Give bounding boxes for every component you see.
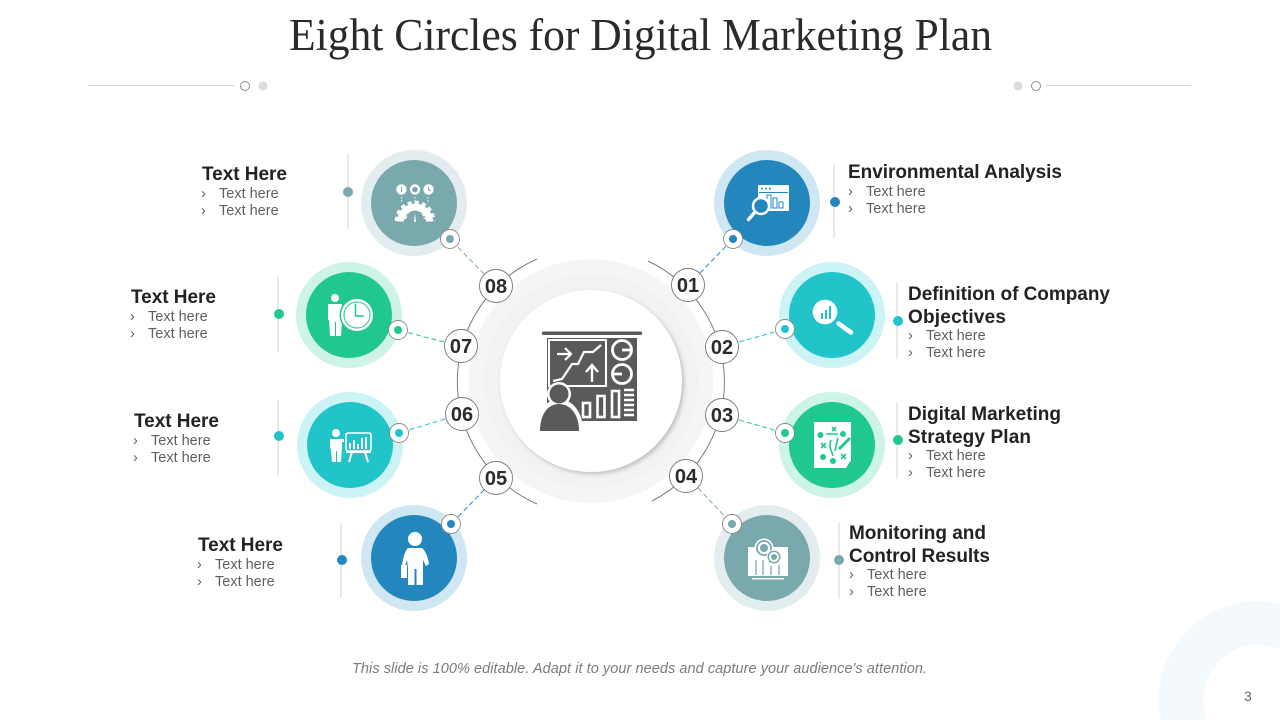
icon: magnifier with bars xyxy=(813,300,851,332)
central hub xyxy=(469,259,713,503)
circle 05: person with briefcase xyxy=(361,505,467,611)
connector lines xyxy=(398,239,785,524)
text block 04: Text here xyxy=(867,567,927,583)
icon: businessman xyxy=(401,532,429,585)
text block 03: Text here xyxy=(926,448,986,464)
text block 01: Environmental Analysis xyxy=(848,162,1062,183)
text block 04: › xyxy=(849,567,854,583)
footer note: This slide is 100% editable. Adapt it to your needs and capture your audience's attention. xyxy=(352,661,927,677)
text block 04 xyxy=(834,523,990,600)
text block 04: Text here xyxy=(867,584,927,600)
circle 07: person and clock xyxy=(296,262,408,368)
icon: person with clock xyxy=(328,294,374,336)
text block 03: › xyxy=(908,465,913,481)
pin 06 xyxy=(390,424,408,442)
text block 07: › xyxy=(130,326,135,342)
number badge 04 xyxy=(670,460,702,492)
header ornament left xyxy=(88,82,268,90)
text block 08: Text here xyxy=(219,203,279,219)
pin 04 xyxy=(722,514,742,534)
text block 07 xyxy=(130,276,284,352)
pin 02 xyxy=(776,320,794,338)
number badge 04: 04 xyxy=(675,466,698,488)
circle 01: environmental analysis xyxy=(714,150,820,256)
text block 05 xyxy=(197,523,347,598)
circle 03: digital marketing strategy plan xyxy=(776,392,885,498)
text block 03: › xyxy=(908,448,913,464)
text block 03: Strategy Plan xyxy=(908,427,1031,448)
number badge 03: 03 xyxy=(711,405,733,427)
number badge 01: 01 xyxy=(677,275,699,297)
pin 08 xyxy=(440,230,460,248)
number badge 03 xyxy=(706,398,738,432)
header ornament right xyxy=(1014,82,1191,90)
text block 06: › xyxy=(133,433,138,449)
icon: screen with gears xyxy=(748,538,788,580)
text block 05: › xyxy=(197,574,202,590)
text block 04: Control Results xyxy=(849,546,990,567)
background corner ring xyxy=(1159,601,1280,720)
text block 02 xyxy=(893,283,1110,361)
text block 05: › xyxy=(197,557,202,573)
text block 03 xyxy=(893,403,1061,481)
text block 07: › xyxy=(130,309,135,325)
text block 02: › xyxy=(908,345,913,361)
number badge 06: 06 xyxy=(451,404,473,426)
text block 01: › xyxy=(848,201,853,217)
number badge 07: 07 xyxy=(450,336,472,358)
text block 08: Text here xyxy=(219,186,279,202)
number badge 06 xyxy=(446,398,478,430)
pin 01 xyxy=(724,230,742,248)
text block 05: Text here xyxy=(215,574,275,590)
text block 08: Text Here xyxy=(202,164,287,185)
outer arcs xyxy=(457,259,724,504)
text block 01: Text here xyxy=(866,184,926,200)
text block 06: Text here xyxy=(151,450,211,466)
circle 06: presenter at board xyxy=(297,392,408,498)
number badge 08: 08 xyxy=(485,276,507,298)
title: Eight Circles for Digital Marketing Plan xyxy=(289,10,992,60)
text block 07: Text here xyxy=(148,309,208,325)
icon: speedometer gear xyxy=(396,184,434,222)
text block 04: › xyxy=(849,584,854,600)
page number: 3 xyxy=(1244,688,1252,704)
text block 06 xyxy=(133,400,284,476)
text block 02: Text here xyxy=(926,328,986,344)
icon: presenter with dashboard xyxy=(536,332,642,431)
text block 08: › xyxy=(201,186,206,202)
text block 01: Text here xyxy=(866,201,926,217)
text block 07: Text Here xyxy=(131,287,216,308)
text block 04: Monitoring and xyxy=(849,523,986,544)
icon: presenter and chart xyxy=(330,429,371,462)
text block 06: Text Here xyxy=(134,411,219,432)
icon: browser window with magnifier xyxy=(748,185,789,220)
number badge 01 xyxy=(672,268,704,302)
text block 01 xyxy=(830,162,1062,238)
pin 05 xyxy=(442,514,460,534)
text block 02: › xyxy=(908,328,913,344)
text block 02: Objectives xyxy=(908,307,1006,328)
text block 02: Text here xyxy=(926,345,986,361)
number badge 07 xyxy=(444,330,478,362)
text block 05: Text Here xyxy=(198,535,283,556)
number badge 02 xyxy=(706,330,738,364)
icon: strategy paper xyxy=(814,422,851,468)
pin 03 xyxy=(776,424,794,442)
circle 08: gauge and gear xyxy=(361,150,467,256)
number badge 08 xyxy=(480,270,512,302)
text block 06: › xyxy=(133,450,138,466)
circle 02: definition of company objectives xyxy=(776,262,885,368)
text block 03: Text here xyxy=(926,465,986,481)
text block 03: Digital Marketing xyxy=(908,404,1061,425)
text block 07: Text here xyxy=(148,326,208,342)
pin 07 xyxy=(388,320,408,340)
text block 06: Text here xyxy=(151,433,211,449)
number badge 05 xyxy=(480,462,512,494)
text block 02: Definition of Company xyxy=(908,284,1110,305)
text block 08 xyxy=(201,153,353,229)
text block 01: › xyxy=(848,184,853,200)
circle 04: monitoring and control results xyxy=(714,505,820,611)
number badge 02: 02 xyxy=(711,337,733,359)
number badge 05: 05 xyxy=(485,468,507,490)
text block 08: › xyxy=(201,203,206,219)
text block 05: Text here xyxy=(215,557,275,573)
